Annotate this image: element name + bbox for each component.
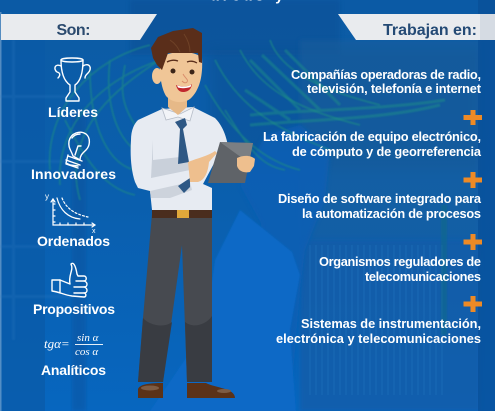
left column: attributes: [31, 58, 116, 378]
item: regulatory bodies: [319, 254, 481, 284]
hands: [188, 151, 217, 182]
shoes: [138, 383, 163, 398]
banner: Trabajan en: [338, 14, 495, 40]
shirt waist shadow: [150, 182, 192, 198]
banner: Son: Son:: [56, 22, 90, 39]
icon: formula: tgα=: [44, 336, 70, 351]
icon: plus: [464, 172, 482, 188]
label: Analíticos: Analíticos: [41, 362, 106, 378]
label: Ordenados: Ordenados: [37, 233, 110, 249]
tie: [175, 118, 189, 164]
item: instrumentation systems: Sistemas de instrumentación,: [301, 316, 481, 331]
item: regulatory bodies: Organismos reguladores de: [319, 254, 481, 269]
technician silhouette in photo: [225, 125, 330, 411]
icon: plus: [464, 110, 482, 125]
graph axis letters: [45, 192, 96, 235]
graph axis letters: y: [45, 192, 49, 201]
item: instrumentation systems: [276, 316, 481, 346]
label: Innovadores: Innovadores: [31, 166, 116, 182]
right column: workplaces: [263, 67, 482, 346]
banner: Trabajan en: Trabajan en:: [383, 22, 477, 39]
item: integrated software design: [278, 191, 482, 221]
tablet: [208, 142, 253, 183]
icon: plus: [464, 234, 482, 250]
label: Propositivos: Propositivos: [33, 301, 115, 317]
illustration: man with tablet: [131, 28, 255, 398]
trousers: [138, 214, 212, 382]
green cables: [50, 40, 380, 200]
collar: [162, 107, 194, 121]
nose and smile: [182, 74, 188, 83]
item: electronic equipment manufacture: de cómputo y de georreferencia: [292, 144, 482, 159]
banner: Son: [1, 14, 157, 40]
icon: graph: [51, 198, 95, 227]
item: instrumentation systems: electrónica y telecomunicaciones: [276, 331, 481, 346]
item: electronic equipment manufacture: La fabricación de equipo electrónico,: [263, 129, 481, 144]
icon: plus: [464, 296, 482, 312]
neck: [168, 94, 187, 115]
icon: formula: cos α: [75, 346, 98, 358]
shirt: [131, 107, 228, 210]
item: regulatory bodies: telecomunicaciones: [365, 269, 481, 284]
shirt sleeve fold: [151, 140, 190, 178]
hair: [151, 28, 202, 70]
icon: formula: sin α: [77, 332, 99, 344]
icon: trophy: [55, 58, 90, 101]
icon: thumbs up: [52, 263, 87, 297]
item: radio and television companies: Compañías operadoras de radio,: [291, 67, 481, 82]
item: radio and television companies: [291, 67, 482, 96]
item: integrated software design: la automatización de procesos: [302, 206, 481, 221]
item: integrated software design: Diseño de software integrado para: [278, 191, 482, 206]
label: Líderes: Líderes: [48, 104, 98, 120]
head: [152, 68, 162, 84]
graph axis letters: x: [92, 228, 96, 235]
item: electronic equipment manufacture: [263, 129, 482, 159]
icon: formula: [44, 332, 103, 358]
icon: light bulb: [66, 132, 89, 168]
item: radio and television companies: televisión, telefonía e internet: [307, 81, 482, 96]
belt: [152, 209, 212, 218]
eyes and brows: [170, 68, 176, 74]
